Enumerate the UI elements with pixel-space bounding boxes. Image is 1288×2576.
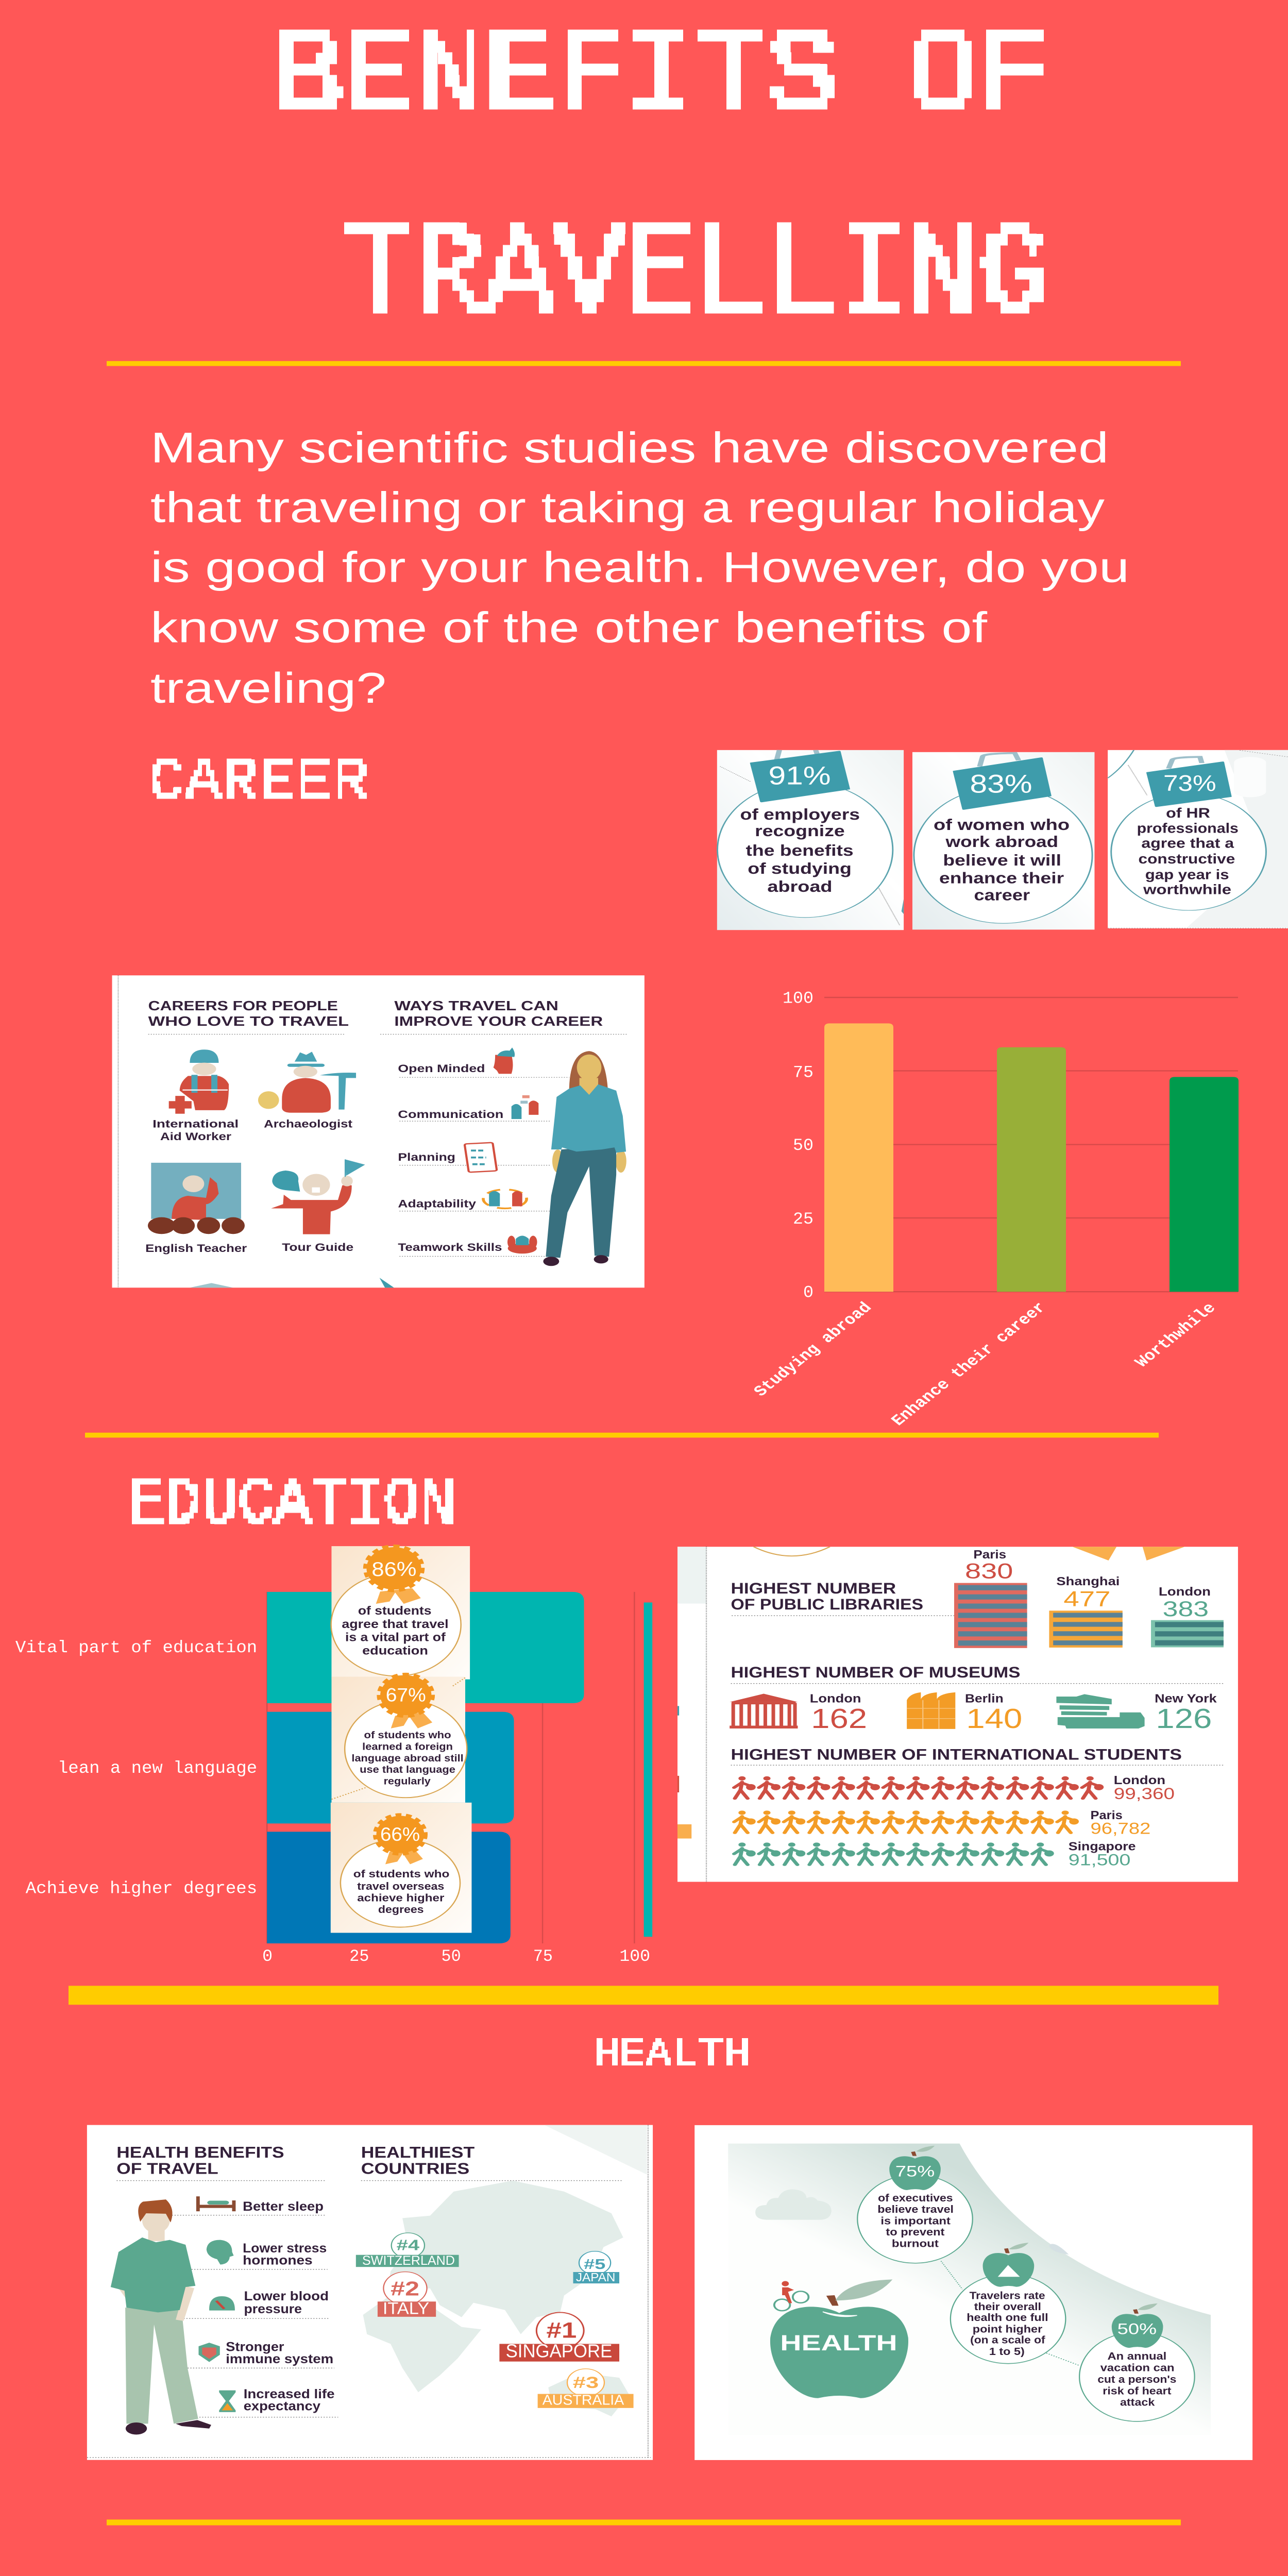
card: 86% of students: is a vital part of: [345, 1631, 446, 1644]
card: 73% of HR professionals: of HR: [1166, 805, 1210, 821]
rank: #2 italy: [378, 2272, 436, 2318]
skill: open minded: [398, 1047, 515, 1075]
label: english teacher: English Teacher: [145, 1242, 247, 1255]
icon: cyclist: [774, 2281, 808, 2311]
bubble: overall health: point higher: [973, 2323, 1042, 2335]
bubble: 75% executives: of executives: [878, 2192, 953, 2204]
rank: #1 singapore: #1: [546, 2318, 577, 2343]
card: 91% of employers: recognize: [755, 822, 845, 840]
students row: paris: Paris: [1091, 1808, 1123, 1822]
bubble: overall health: (on a scale of: [970, 2334, 1045, 2346]
museum: new york: New York: [1155, 1692, 1217, 1705]
students row: london: 99,360: [1114, 1785, 1175, 1803]
axis labels: 50: [442, 1947, 461, 1967]
card: 67% of students: learned a foreign: [362, 1741, 453, 1752]
bar chart: career: [750, 989, 1239, 1429]
card: 66% of students: of students who: [353, 1869, 449, 1880]
rank: #1 singapore: [499, 2312, 619, 2362]
benefit: increased life expectancy: Increased life: [244, 2387, 334, 2401]
heading: health benefits of travel: OF TRAVEL: [116, 2159, 218, 2177]
label: archaeologist: Archaeologist: [264, 1118, 352, 1130]
big apple: [770, 2279, 908, 2398]
heading: ways travel can improve your career: IMPROVE YOUR CAREER: [394, 1013, 603, 1028]
skill: adaptability: [398, 1190, 527, 1210]
card: 73% of HR professionals: [1108, 750, 1288, 928]
rank: #4 switzerland: [356, 2233, 459, 2268]
bubble: 50% heart attack: risk of heart: [1103, 2385, 1172, 2397]
card: 66% of students: travel overseas: [357, 1881, 444, 1892]
category labels: lean a new language: [58, 1758, 257, 1778]
y axis labels: 50: [793, 1136, 814, 1155]
x axis labels: Enhance their career: [888, 1299, 1050, 1429]
benefit: lower stress hormones: [207, 2240, 327, 2267]
students row: paris: 96,782: [1091, 1820, 1150, 1838]
label: tour guide: Tour Guide: [282, 1241, 353, 1253]
heading: public libraries: [731, 1580, 923, 1613]
library stack: paris: Paris: [973, 1548, 1006, 1561]
card: 86% of students: [331, 1546, 470, 1680]
benefit: lower blood pressure: [209, 2289, 329, 2316]
card: 91% of employers: 91%: [769, 761, 831, 790]
y axis labels: 75: [793, 1063, 814, 1082]
panel: health apple statistics: [694, 2125, 1252, 2460]
bubble: overall health: Travelers rate: [970, 2290, 1045, 2301]
library stack: london: 383: [1163, 1597, 1209, 1621]
category labels: Achieve higher degrees: [26, 1879, 257, 1899]
card: 83% of women: career: [974, 887, 1030, 904]
rank: #4 switzerland: SWITZERLAND: [362, 2253, 455, 2268]
card: 73% of HR professionals: 73%: [1163, 771, 1216, 796]
benefit: stronger immune system: Stronger: [226, 2340, 284, 2354]
rank: #5 japan: [573, 2251, 619, 2284]
card: 66% of students: [331, 1803, 471, 1933]
title: [273, 9, 1048, 344]
axis labels: 0: [262, 1947, 273, 1967]
intro text: is good for your health. However, do you: [150, 544, 1129, 591]
students row: singapore: Singapore: [1069, 1840, 1136, 1853]
rank: #3 australia: #3: [573, 2374, 599, 2392]
rank: #5 japan: JAPAN: [576, 2270, 615, 2284]
bubble: 75% executives: to prevent: [886, 2226, 945, 2238]
card: 86% of students: agree that travel: [342, 1617, 449, 1631]
card: 91% of employers: [717, 750, 904, 930]
heading: public libraries: OF PUBLIC LIBRARIES: [731, 1596, 923, 1613]
bubble: 75% executives: 75%: [895, 2163, 935, 2180]
rank: #2 italy: ITALY: [383, 2299, 429, 2318]
icon: archaeologist: [258, 1052, 356, 1113]
skill: open minded: Open Minded: [398, 1062, 485, 1075]
card: 91% of employers: of studying: [748, 860, 852, 877]
divider: education / health: [69, 1986, 1218, 2005]
x axis labels: [750, 1299, 1220, 1429]
label: international aid worker: International: [152, 1118, 239, 1130]
heading: museums: HIGHEST NUMBER OF MUSEUMS: [731, 1664, 1020, 1681]
benefit: lower stress hormones: Lower stress: [243, 2241, 327, 2256]
rank: #2 italy: #2: [391, 2278, 419, 2300]
card: 83% of women: of women who: [934, 816, 1070, 834]
bubble: overall health: [951, 2243, 1065, 2364]
heading: education: EDUCATION: [129, 1469, 456, 1540]
axis labels: 25: [349, 1947, 369, 1967]
label: international aid worker: Aid Worker: [160, 1131, 231, 1143]
card: 91% of employers: abroad: [767, 878, 832, 895]
bar: achieve higher degrees: [267, 1832, 511, 1943]
icon: international aid worker: [169, 1049, 229, 1114]
bar: enhance their career: [997, 1047, 1066, 1292]
rank: #1 singapore: SINGAPORE: [506, 2341, 612, 2362]
heading: ways travel can improve your career: [394, 998, 603, 1028]
category labels: Vital part of education: [15, 1638, 257, 1657]
benefit: lower blood pressure: Lower blood: [244, 2289, 329, 2303]
bubble: overall health: health one full: [967, 2311, 1048, 2324]
panel: career statistics cards: [717, 750, 1288, 930]
title: BENEFITS OF: [273, 9, 1048, 146]
bubble: 50% heart attack: 50%: [1117, 2320, 1157, 2337]
museum: berlin: Berlin: [965, 1692, 1004, 1705]
rank: #3 australia: AUSTRALIA: [543, 2392, 624, 2408]
skill: planning: Planning: [398, 1151, 455, 1163]
axis labels: [262, 1947, 650, 1967]
x axis labels: Studying abroad: [750, 1299, 876, 1400]
students row: london: [734, 1773, 1175, 1803]
bubble: overall health: 1 to 5): [989, 2345, 1025, 2358]
card: 91% of employers: of employers: [740, 806, 860, 823]
x axis labels: Worthwhile: [1131, 1300, 1220, 1371]
y axis labels: 25: [793, 1210, 814, 1229]
heading: healthiest countries: [361, 2143, 475, 2177]
library stack: shanghai: Shanghai: [1056, 1574, 1120, 1588]
heading: ways travel can improve your career: WAYS TRAVEL CAN: [394, 998, 558, 1013]
heading: careers for people who love to travel: CAREERS FOR PEOPLE: [148, 998, 338, 1013]
benefit: increased life expectancy: [219, 2387, 334, 2413]
panel: health benefits and healthiest countries: [87, 2125, 653, 2460]
bubble: 50% heart attack: [1079, 2303, 1195, 2421]
card: 66% of students: 66%: [380, 1824, 420, 1845]
students row: singapore: [734, 1840, 1136, 1869]
students row: singapore: 91,500: [1069, 1851, 1130, 1869]
card: 67% of students: [331, 1675, 467, 1803]
bubble: 50% heart attack: vacation can: [1100, 2362, 1175, 2374]
title: TRAVELLING: [343, 207, 1048, 344]
world map: [363, 2181, 629, 2416]
library stack: london: [1151, 1585, 1224, 1647]
students row: london: London: [1114, 1773, 1165, 1787]
card: 67% of students: language abroad still: [351, 1753, 464, 1764]
museum: london: [730, 1692, 867, 1734]
bar: studying abroad: [824, 1023, 893, 1292]
skill: teamwork skills: [398, 1236, 537, 1253]
card: 67% of students: use that language: [360, 1764, 455, 1775]
skill: communication: [398, 1095, 538, 1121]
icon: english teacher: [148, 1163, 245, 1234]
heading: careers for people who love to travel: [148, 998, 349, 1028]
bottom divider: [107, 2519, 1181, 2526]
card: 91% of employers: the benefits: [746, 842, 854, 859]
bar: vital part of education: [267, 1592, 584, 1703]
panel: careers and ways travel can improve your career: [112, 975, 645, 1287]
skill: communication: Communication: [398, 1108, 503, 1121]
panel: education chart with badge cards: [15, 1546, 652, 1967]
intro text: that traveling or taking a regular holiday: [150, 484, 1105, 531]
label: international aid worker: [152, 1118, 239, 1143]
students row: paris: [734, 1808, 1150, 1838]
skill: planning: [398, 1143, 497, 1172]
benefit: stronger immune system: immune system: [226, 2352, 333, 2366]
museum: berlin: [907, 1692, 1022, 1734]
museum: new york: [1056, 1692, 1217, 1734]
benefit: lower blood pressure: pressure: [244, 2302, 302, 2316]
heading: career: CAREER: [148, 748, 369, 817]
skill: adaptability: Adaptability: [398, 1198, 476, 1210]
bubble: 75% executives: [857, 2146, 973, 2263]
card: 83% of women: enhance their: [939, 870, 1064, 887]
card: 86% of students: education: [362, 1644, 428, 1657]
bubble: 50% heart attack: An annual: [1107, 2350, 1166, 2362]
card: 86% of students: of students: [358, 1604, 431, 1617]
heading: health benefits of travel: HEALTH BENEFITS: [116, 2143, 284, 2161]
museum: new york: 126: [1156, 1703, 1212, 1734]
museum: berlin: 140: [966, 1703, 1022, 1734]
card: 83% of women: 83%: [970, 769, 1032, 798]
library stack: shanghai: [1049, 1574, 1123, 1648]
divider: career / education: [85, 1433, 1159, 1437]
bar: worthwhile: [1170, 1077, 1239, 1292]
bubble: 50% heart attack: attack: [1120, 2396, 1155, 2408]
side bar: [644, 1602, 652, 1937]
card: 83% of women: believe it will: [943, 852, 1061, 869]
title divider: [107, 361, 1181, 366]
benefit: lower stress hormones: hormones: [243, 2253, 313, 2267]
card: 86% of students: 86%: [371, 1558, 416, 1581]
card: 67% of students: 67%: [386, 1685, 426, 1706]
figure: woman: [543, 1051, 626, 1266]
library stack: paris: 830: [965, 1560, 1013, 1583]
intro text: Many scientific studies have discovered: [150, 424, 1109, 471]
heading: careers for people who love to travel: WHO LOVE TO TRAVEL: [148, 1013, 349, 1028]
y axis labels: 100: [783, 989, 814, 1008]
rank: #5 japan: #5: [584, 2257, 605, 2273]
library stack: london: London: [1159, 1585, 1211, 1598]
benefit: stronger immune system: [198, 2340, 333, 2366]
library stack: shanghai: 477: [1063, 1587, 1110, 1611]
bubble: 50% heart attack: cut a person's: [1097, 2373, 1176, 2385]
heading: health benefits of travel: [116, 2143, 284, 2177]
card: 83% of women: work abroad: [945, 833, 1058, 851]
rank: #4 switzerland: #4: [397, 2236, 419, 2253]
bubble: overall health: their overall: [974, 2300, 1041, 2313]
card: 83% of women: [912, 752, 1094, 929]
skill: teamwork skills: Teamwork Skills: [398, 1241, 502, 1253]
benefit: increased life expectancy: expectancy: [244, 2399, 320, 2413]
library stack: paris: [954, 1548, 1027, 1648]
heading: public libraries: HIGHEST NUMBER: [731, 1580, 896, 1597]
card: 66% of students: degrees: [378, 1904, 424, 1916]
intro text: traveling?: [150, 664, 386, 712]
y axis labels: 0: [803, 1283, 814, 1302]
figure: man: [111, 2199, 211, 2434]
heading: healthiest countries: HEALTHIEST: [361, 2143, 475, 2161]
big apple: HEALTH: [780, 2331, 897, 2355]
y axis labels: [783, 989, 814, 1302]
card: 66% of students: achieve higher: [357, 1892, 444, 1904]
icon: cloud: [755, 2189, 832, 2220]
heading: healthiest countries: COUNTRIES: [361, 2159, 469, 2177]
axis labels: 75: [533, 1947, 553, 1967]
panel: libraries, museums and international students: [677, 1547, 1238, 1882]
intro text: know some of the other benefits of: [150, 603, 988, 651]
rank: #3 australia: [538, 2369, 634, 2408]
bar: learn a new language: [267, 1712, 514, 1823]
benefit: better sleep: [196, 2196, 324, 2214]
intro text: [150, 424, 1129, 712]
category labels: [15, 1638, 257, 1899]
benefit: better sleep: Better sleep: [243, 2199, 324, 2214]
heading: health: HEALTH: [594, 2032, 750, 2079]
card: 67% of students: of students who: [364, 1730, 451, 1740]
bubble: 75% executives: burnout: [892, 2238, 939, 2249]
axis labels: 100: [619, 1947, 650, 1967]
bubble: 75% executives: is important: [880, 2214, 951, 2227]
museum: london: 162: [811, 1703, 867, 1734]
museum: london: London: [810, 1692, 861, 1705]
icon: tour guide: [271, 1159, 365, 1234]
card: 67% of students: regularly: [384, 1775, 431, 1787]
bubble: 75% executives: believe travel: [877, 2203, 954, 2215]
